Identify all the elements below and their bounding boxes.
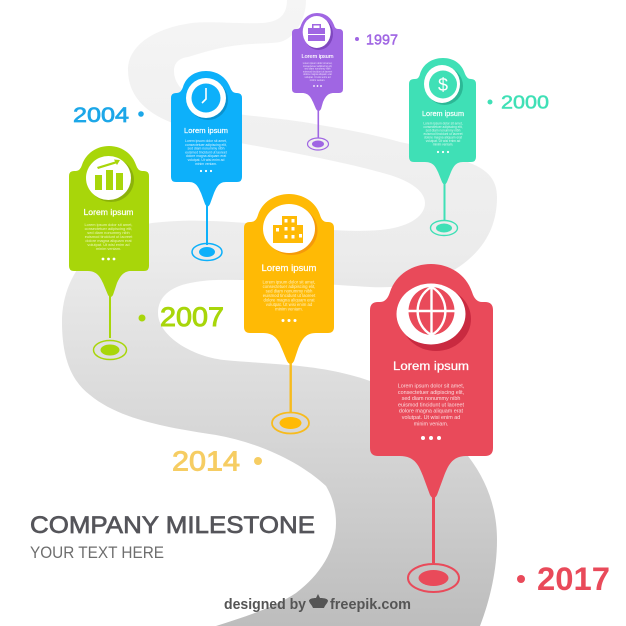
card text: consectetuer adipiscing elit, [303,65,333,68]
milestone 2014: yellow marker [244,194,334,434]
card text: Lorem ipsum dolor sit amet, [84,222,133,227]
footer credit: designed by [224,596,307,613]
card text: volutpat. Ut wisi enim ad [426,139,460,143]
card text: Lorem ipsum dolor sit amet, [262,280,316,284]
subtitle: YOUR TEXT HERE [30,543,164,562]
card text: Lorem ipsum dolor sit amet, [185,139,227,143]
card text: dolore magna aliquam erat [399,409,464,415]
card text [262,280,316,312]
card text: minim veniam. [414,421,448,427]
icon: dollar coin [429,70,457,98]
card text: minim veniam. [275,306,303,312]
card text: volutpat. Ut wisi enim ad [87,242,130,247]
card text: euismod tincidunt ut laoreet [303,70,332,73]
card text: consectetuer adipiscing elit, [85,226,132,231]
card text: sed diam nonummy nibh [188,147,225,151]
card text [398,384,465,427]
card text: euismod tincidunt ut laoreet [185,150,227,154]
year 2000 [488,92,549,112]
card text: volutpat. Ut wisi enim ad [188,158,224,162]
card text: volutpat. Ut wisi enim ad [305,76,331,79]
card text: sed diam nonummy nibh [426,128,461,132]
icon: freepik logo [309,594,328,608]
icon: globe [408,286,455,336]
card title: Lorem ipsum [84,208,134,217]
dots [313,85,322,87]
card title: Lorem ipsum [302,54,334,60]
card text: volutpat. Ut wisi enim ad [266,302,313,307]
year 2017: 2017 [537,561,610,597]
milestone 2007: green marker [69,146,149,360]
card text [303,62,333,82]
card text: minim veniam. [195,162,217,166]
milestone 2004: blue marker [171,71,242,260]
card text: dolore magna aliquam erat [424,136,462,140]
card title: Lorem ipsum [422,111,464,118]
dots [437,151,449,153]
year 1997: 1997 [366,32,398,48]
card text: Lorem ipsum dolor sit amet, [303,62,333,65]
year 2004: 2004 [73,104,129,127]
card text: volutpat. Ut wisi enim ad [402,415,460,421]
card text: euismod tincidunt ut laoreet [424,132,463,136]
card text: euismod tincidunt ut laoreet [85,234,133,239]
card text: sed diam nonummy nibh [266,288,313,294]
icon: buildings [273,216,303,243]
dots [421,436,441,440]
card title: Lorem ipsum [184,128,228,135]
card text: dolore magna aliquam erat [85,238,133,243]
footer credit [224,594,411,613]
dots [200,170,212,172]
year 2004 [73,104,144,127]
card title: Lorem ipsum [262,263,316,273]
icon: dollar coin: $ [438,75,448,95]
year 2014: 2014 [172,446,240,476]
card text: Lorem ipsum dolor sit amet, [398,384,465,390]
title: COMPANY MILESTONE [30,512,315,539]
card text: minim veniam. [433,142,453,146]
card text: minim veniam. [96,246,121,251]
card text [185,139,227,166]
card text: euismod tincidunt ut laoreet [398,402,464,408]
card title: Lorem ipsum [393,361,469,373]
card text: euismod tincidunt ut laoreet [263,293,316,298]
card text: dolore magna aliquam erat [186,154,226,158]
card text: Lorem ipsum dolor sit amet, [423,122,463,126]
winding road [62,0,497,626]
year 2000: 2000 [501,92,549,112]
icon: briefcase [308,24,325,41]
card text: sed diam nonummy nibh [304,68,331,71]
dots [282,319,296,322]
card text: consectetuer adipiscing elit, [398,390,465,396]
milestone 1997: purple marker [292,13,343,150]
card text: consectetuer adipiscing elit, [185,143,227,147]
year 2007: 2007 [160,302,224,332]
footer credit: freepik.com [330,596,411,613]
card text: sed diam nonummy nibh [87,230,130,235]
card text: sed diam nonummy nibh [402,396,460,402]
milestone 2000: teal marker [409,58,476,236]
card text: dolore magna aliquam erat [303,73,332,76]
milestone 2017: red marker [370,264,493,592]
card text: consectetuer adipiscing elit, [263,284,315,289]
card text [84,222,133,251]
icon: clock [192,84,220,112]
icon: bar chart [95,160,123,190]
card text: consectetuer adipiscing elit, [423,125,463,129]
card text: minim veniam. [310,79,326,82]
dots [102,258,115,260]
card text [423,122,463,146]
year 2014 [172,446,262,476]
card text: dolore magna aliquam erat [263,298,315,302]
